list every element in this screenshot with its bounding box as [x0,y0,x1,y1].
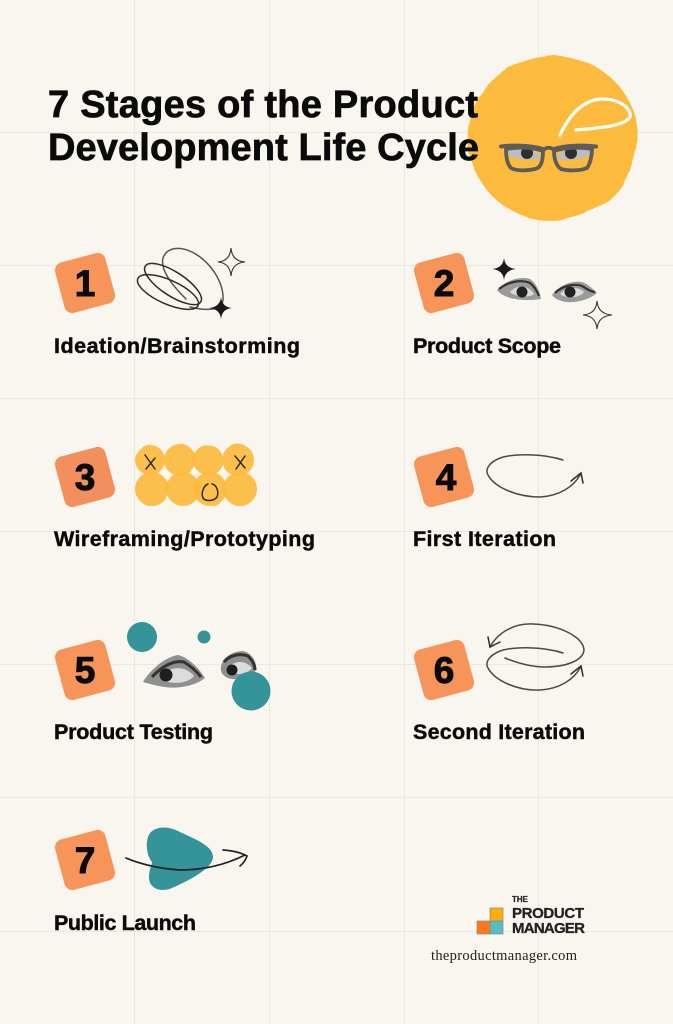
badge 7: 7 [75,840,95,881]
panel: stage 6 [412,624,585,744]
icon: eyes and teal dots [127,622,270,710]
badge 1 [53,251,117,315]
badge 2: 2 [434,263,454,304]
badge 5: 5 [75,650,95,691]
badge 4: 4 [436,457,457,498]
panel: stage 2 [412,251,612,358]
panel: stage 1 [53,248,300,358]
badge 6 [412,638,476,702]
title: Development Life Cycle [48,127,479,169]
title: 7 Stages of the Product [48,84,478,126]
badge 1: 1 [75,263,95,304]
icon: scribble with sparkles [133,248,245,319]
badge 7 [53,828,117,892]
badge 4 [412,445,476,509]
logo: The Product Manager [477,895,585,937]
logo: The Product Manager: PRODUCT [512,905,584,922]
website url: theproductmanager.com [431,948,578,964]
icon: tic-tac-toe yellow circles [135,444,257,506]
badge 3 [53,445,117,509]
label: Public Launch [54,911,196,935]
panel: stage 7 [53,827,247,935]
logo: The Product Manager: MANAGER [512,920,585,937]
icon: teal heart with swoosh arrow [126,827,247,890]
icon: eyes with sparkles [492,258,612,329]
logo squares [477,908,503,934]
badge 5 [53,638,117,702]
label: Ideation/Brainstorming [54,334,300,358]
icon: yellow circle with glasses [468,56,638,220]
label: Product Scope [413,334,561,358]
badge 2 [412,251,476,315]
panel: stage 5 [53,622,270,744]
panel: stage 3 [53,444,315,551]
label: Product Testing [54,720,213,744]
badge 6: 6 [434,650,454,691]
label: First Iteration [413,527,556,551]
logo: The Product Manager: THE [512,895,529,904]
panel: stage 4 [412,445,583,551]
label: Wireframing/Prototyping [54,527,315,551]
badge 3: 3 [75,457,95,498]
title [48,84,479,169]
icon: double iteration loop arrows [487,624,584,690]
label: Second Iteration [413,720,585,744]
icon: single iteration loop arrow [487,455,583,497]
